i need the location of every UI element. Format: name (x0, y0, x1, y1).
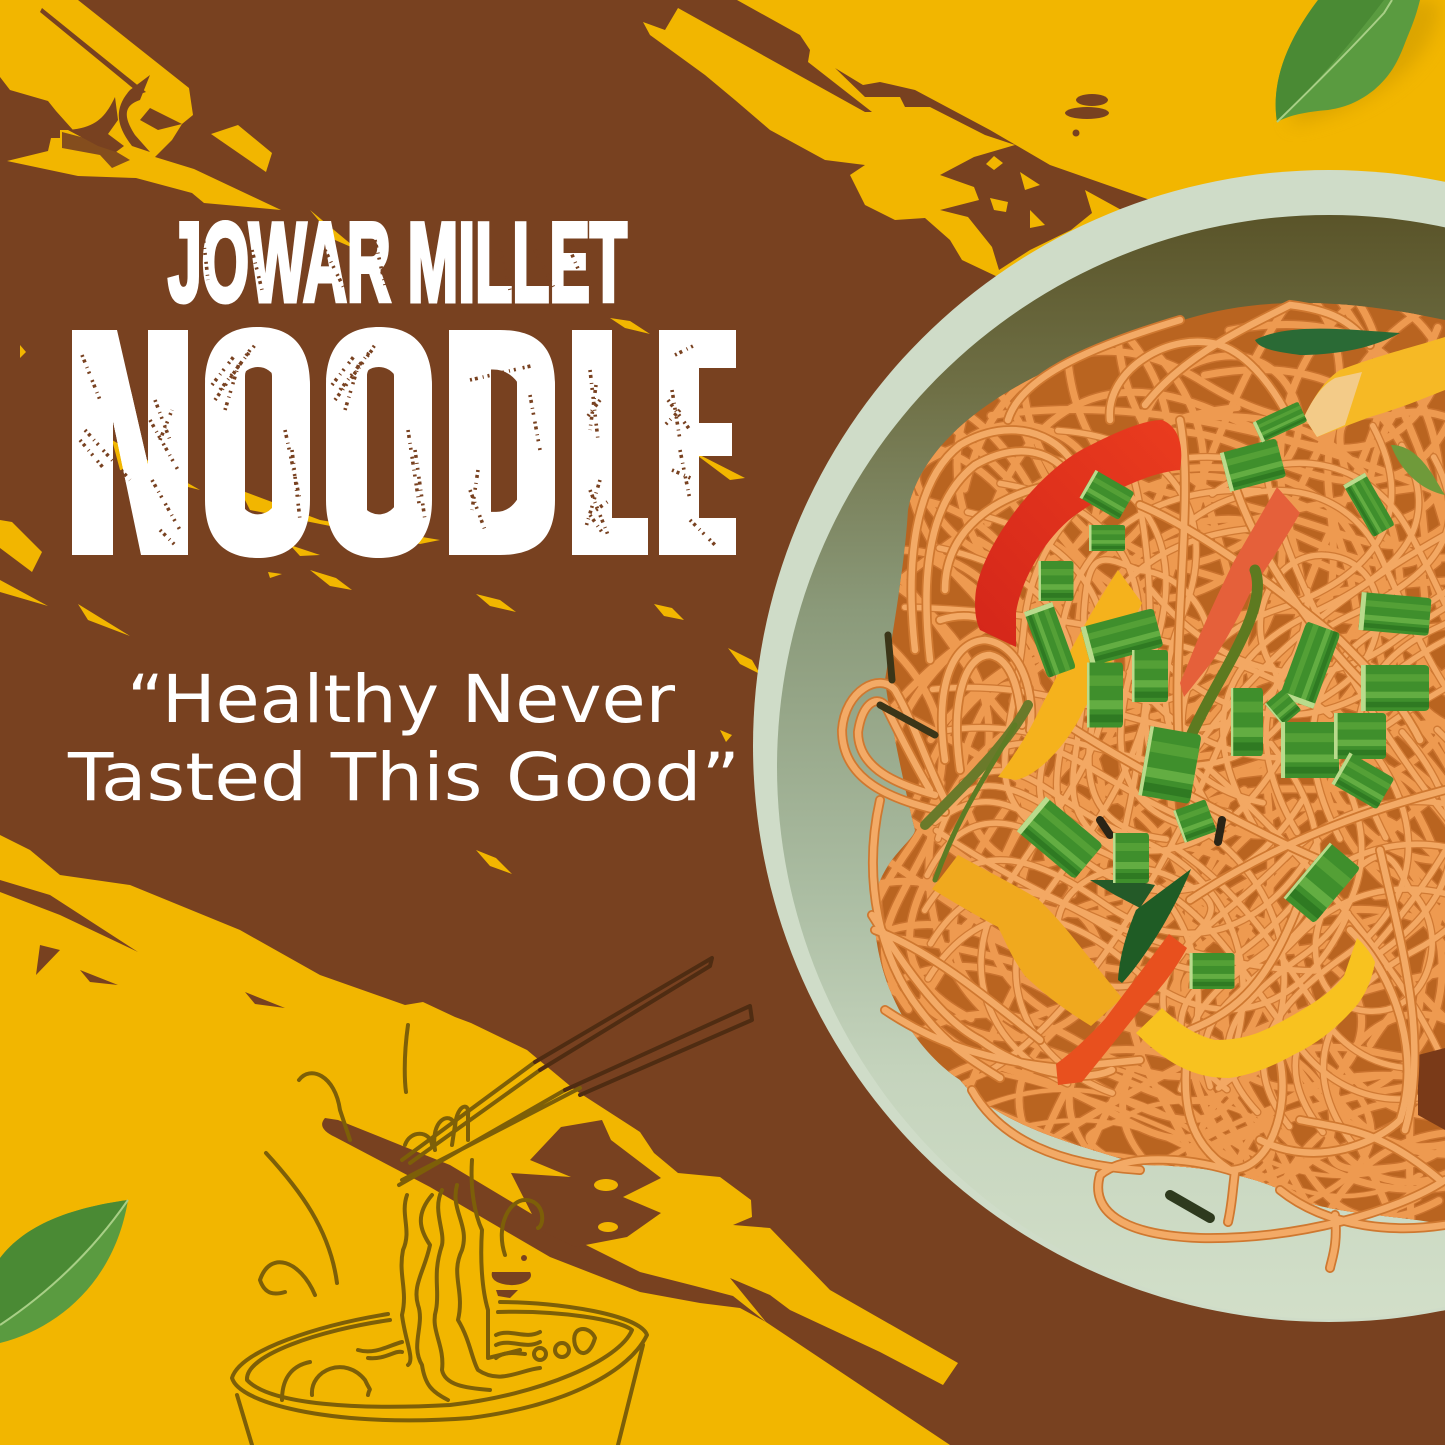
noodle mound (837, 300, 1445, 1273)
leaf: bottom left (0, 1200, 128, 1343)
title: NOODLE: L (564, 269, 652, 611)
letter D: D (440, 269, 562, 611)
letter N (72, 330, 188, 555)
letter E (659, 330, 736, 555)
chillies and dark leaves (880, 329, 1445, 1218)
title: NOODLE: O (320, 269, 438, 611)
tagline: Tasted This Good” (67, 739, 740, 816)
line illustration: noodle bowl with chopsticks (232, 958, 752, 1445)
green onions (1017, 401, 1432, 989)
letter L (572, 330, 648, 555)
rising noodle strands (402, 1107, 542, 1400)
letter O (205, 327, 310, 558)
tagline: “Healthy Never (127, 661, 676, 738)
title: JOWAR MILLET: JOWAR MILLET (168, 200, 627, 325)
leaf: top right (1276, 0, 1440, 125)
bowl rim and body (232, 1302, 647, 1445)
yellow brush strokes: top right (643, 0, 1445, 300)
bell peppers (932, 337, 1445, 1085)
bowl rim (753, 170, 1445, 1322)
letter D (449, 330, 555, 555)
tagline (67, 661, 740, 816)
letter N: N (68, 269, 192, 611)
yellow brush strokes: bottom left (0, 835, 958, 1445)
letter O (326, 327, 432, 558)
bowl of noodles (753, 170, 1445, 1322)
yellow brush strokes: top left (0, 0, 760, 874)
title: NOODLE: O (200, 269, 316, 611)
steam curls (260, 1025, 408, 1295)
title: NOODLE (72, 327, 736, 558)
infographic canvas: E (650, 269, 742, 611)
brown streak and blotch (835, 68, 1150, 270)
title distress speckle (80, 235, 715, 545)
bowl inner wall (777, 215, 1445, 1319)
chopsticks (399, 958, 752, 1185)
